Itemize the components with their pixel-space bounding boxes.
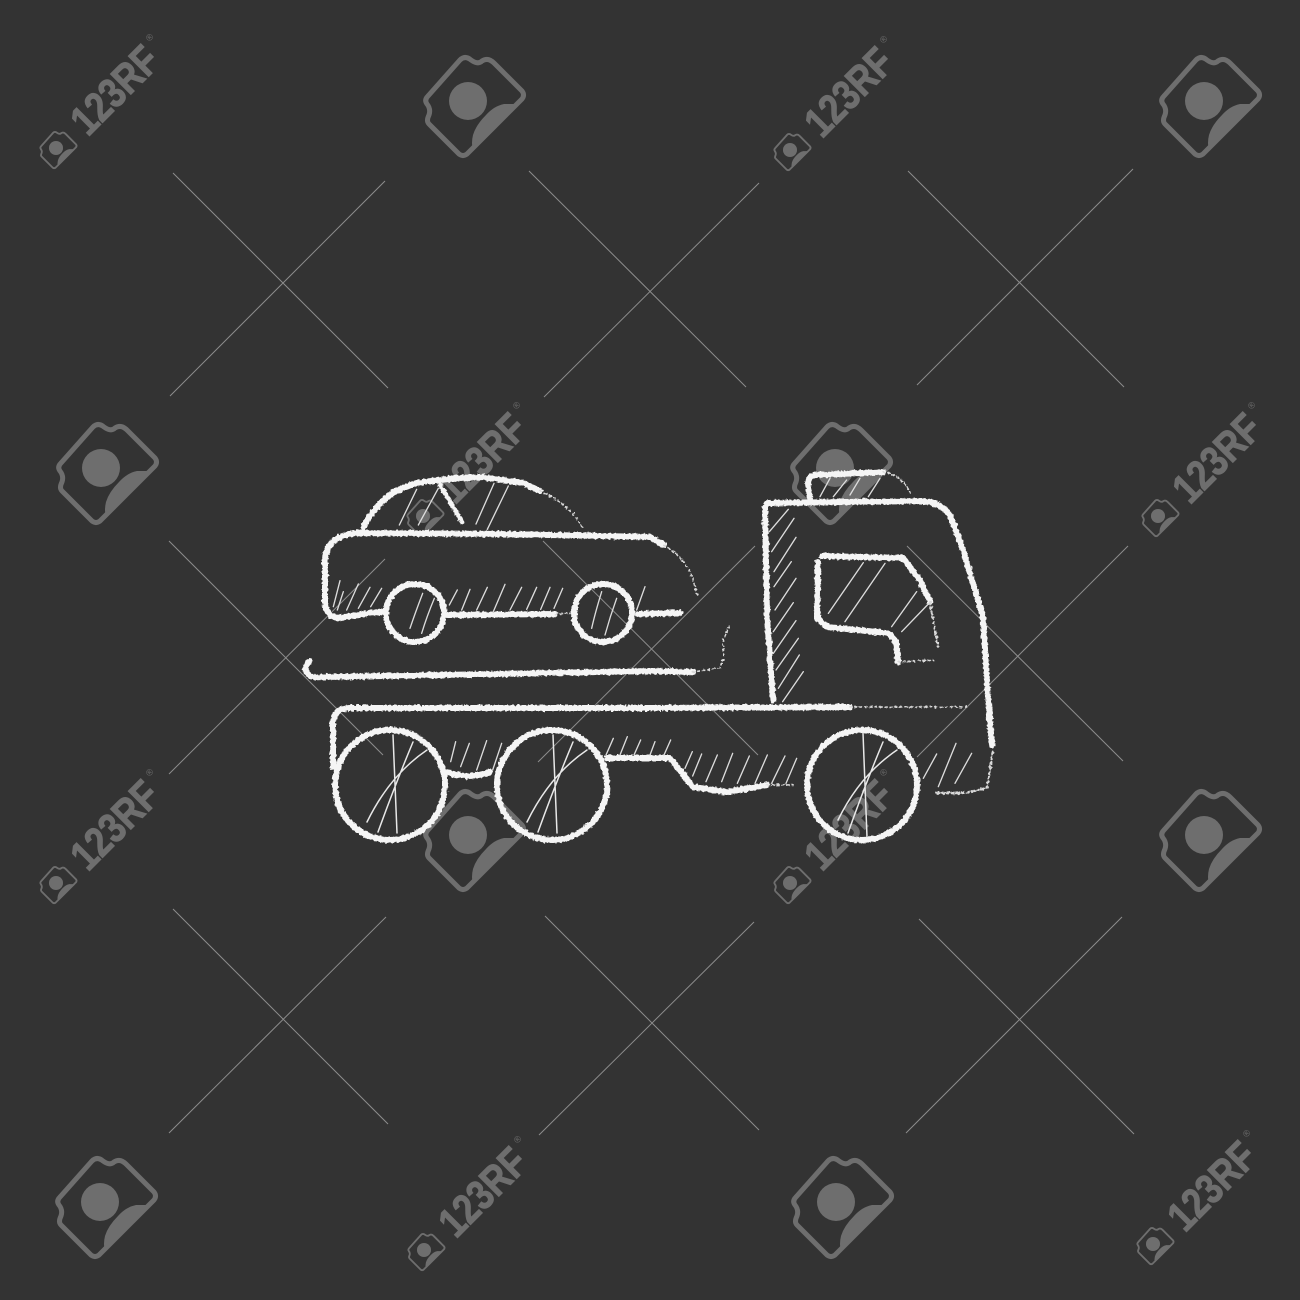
watermark: 123RF row 2 middle: 123RF [428, 404, 535, 512]
watermark: 123RF row 3 left: ® [144, 766, 156, 778]
watermark: 123RF row 1 middle: 123RF [795, 38, 902, 146]
car hatching [333, 483, 645, 635]
watermark: 123RF row 4 middle: ® [512, 1133, 524, 1145]
roof beacon [808, 472, 910, 500]
watermark: 123RF row 2 middle [407, 395, 545, 536]
car body outline [325, 533, 698, 618]
watermark: 123RF row 4 middle: 123RF [429, 1138, 536, 1246]
watermark: large logo row 1 middle [426, 58, 524, 156]
watermark: 123RF row 1 middle [774, 29, 912, 170]
watermark: large logo row 4 middle [794, 1158, 892, 1256]
flatbed deck [306, 627, 729, 678]
watermark: 123RF row 2 right: ® [1246, 399, 1258, 411]
watermark: 123RF row 4 middle [408, 1129, 546, 1270]
truck cabin [765, 472, 992, 745]
cabin window [817, 556, 938, 662]
watermark: 123RF row 3 left: 123RF [61, 771, 168, 879]
watermark: 123RF row 3 middle: ® [878, 766, 890, 778]
watermark: 123RF row 3 middle: 123RF [795, 771, 902, 879]
watermark: 123RF row 3 middle [774, 762, 912, 903]
watermark: 123RF row 3 left [40, 762, 178, 903]
watermark: large logo row 3 middle [426, 792, 524, 890]
watermark: 123RF row 4 right [1137, 1123, 1275, 1264]
car wheels [386, 584, 632, 642]
watermark: 123RF row 1 left [40, 27, 178, 168]
watermark: 123RF row 4 right: ® [1241, 1127, 1253, 1139]
watermark: 123RF row 1 left: ® [144, 31, 156, 43]
rear chassis hatching [451, 737, 641, 770]
truck chassis [333, 707, 993, 793]
watermark: 123RF row 1 middle: ® [878, 33, 890, 45]
watermark: 123RF row 1 left: 123RF [61, 36, 168, 144]
wheel spokes [367, 733, 897, 837]
watermark: 123RF row 2 right [1142, 395, 1280, 536]
watermark: large logo row 2 left [59, 424, 156, 522]
watermark: 123RF row 2 middle: ® [511, 399, 523, 411]
truck wheels [335, 730, 917, 840]
watermark: large logo row 1 right [1162, 58, 1260, 156]
watermark: 123RF row 2 right: 123RF [1163, 404, 1270, 512]
watermark: large logo row 2 middle [793, 424, 890, 522]
car on the flatbed [325, 477, 698, 642]
car roof [363, 477, 582, 528]
thin diagonal cross pattern [169, 169, 1134, 1135]
icon: tow truck carrying a car [306, 472, 993, 840]
cabin and chassis hatching [650, 478, 972, 787]
watermark: 123RF row 4 right: 123RF [1158, 1132, 1265, 1240]
watermark: large logo row 4 left [58, 1158, 156, 1256]
watermark: large logo row 3 right [1162, 792, 1260, 890]
